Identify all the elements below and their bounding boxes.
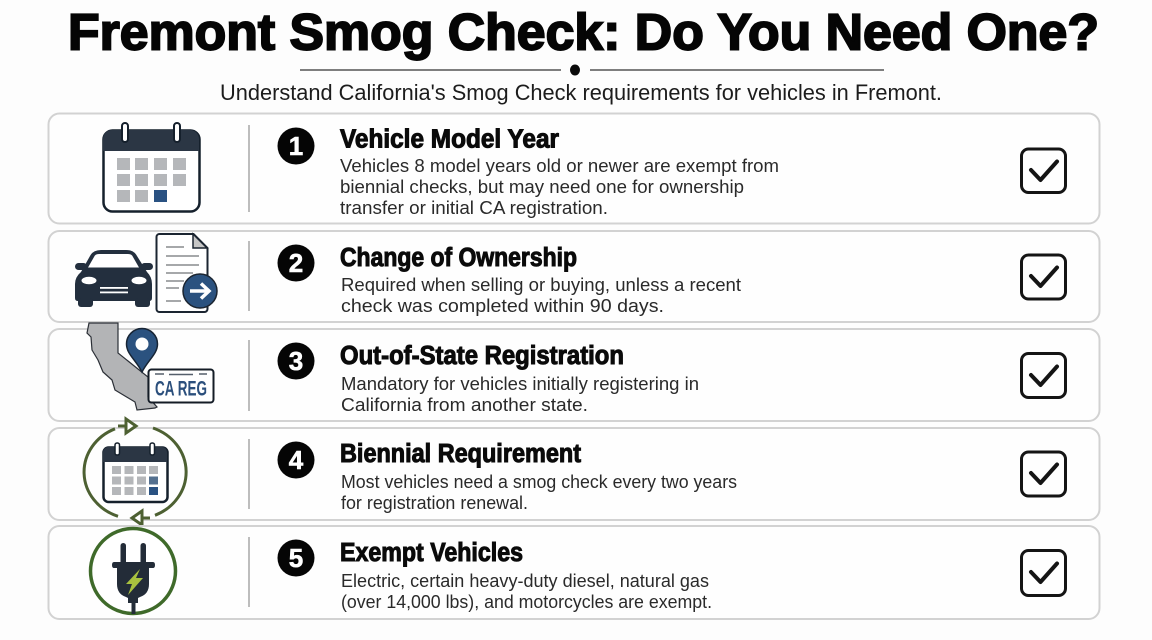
description: Mandatory for vehicles initially registering in xyxy=(341,373,699,394)
location pin xyxy=(126,328,158,372)
description: for registration renewal. xyxy=(341,492,528,513)
number badge 3: 3 xyxy=(289,346,303,376)
calendar xyxy=(104,448,168,502)
heading: Change of Ownership xyxy=(340,244,577,272)
description: Vehicles 8 model years old or newer are exempt from xyxy=(340,155,779,176)
description: check was completed within 90 days. xyxy=(341,295,664,316)
panel: exempt vehicles xyxy=(48,526,1100,619)
heading: Out-of-State Registration xyxy=(340,342,624,370)
license plate xyxy=(148,370,214,402)
icon: checkbox xyxy=(1022,149,1066,192)
number badge 1 xyxy=(278,128,314,164)
panel: out-of-state registration xyxy=(48,323,1100,421)
icon: calendar xyxy=(103,123,200,212)
icon: California map with pin and plate: CA REG xyxy=(155,378,207,400)
icon: electric plug xyxy=(90,528,176,614)
cycle arrows xyxy=(84,419,186,525)
number badge 4 xyxy=(278,442,314,478)
panel: vehicle model year xyxy=(48,114,1100,224)
number badge 5: 5 xyxy=(289,543,303,573)
icon: checkbox xyxy=(1022,452,1066,496)
lightning bolt xyxy=(126,569,143,595)
california map xyxy=(87,323,157,410)
description: Required when selling or buying, unless a recent xyxy=(341,274,741,295)
icon: California map with pin and plate xyxy=(87,323,214,410)
description xyxy=(340,155,779,218)
number badge 5 xyxy=(278,540,314,576)
description: Electric, certain heavy-duty diesel, natural gas xyxy=(341,570,709,591)
subtitle: Understand California's Smog Check requirements for vehicles in Fremont. xyxy=(220,80,942,105)
description xyxy=(341,274,741,316)
panel: biennial requirement xyxy=(48,419,1100,525)
title: Fremont Smog Check: Do You Need One? xyxy=(68,4,1099,60)
description: transfer or initial CA registration. xyxy=(340,197,608,218)
description: (over 14,000 lbs), and motorcycles are exempt. xyxy=(341,591,712,612)
description xyxy=(341,471,737,513)
number badge 1: 1 xyxy=(289,131,303,161)
description xyxy=(341,373,699,415)
number badge 2 xyxy=(278,244,314,282)
arrow badge xyxy=(183,274,217,308)
car xyxy=(75,250,153,307)
icon: calendar with cycle arrows xyxy=(84,419,186,525)
description: Most vehicles need a smog check every two years xyxy=(341,471,737,492)
heading: Exempt Vehicles xyxy=(340,539,523,567)
document xyxy=(156,234,208,312)
icon: checkbox xyxy=(1022,550,1066,596)
icon: checkbox xyxy=(1022,354,1066,398)
description: biennial checks, but may need one for ownership xyxy=(340,176,744,197)
description xyxy=(341,570,712,612)
heading: Vehicle Model Year xyxy=(340,126,559,154)
icon: car and document xyxy=(75,234,217,312)
number badge 2: 2 xyxy=(289,248,303,278)
icon: checkbox xyxy=(1022,255,1066,299)
number badge 4: 4 xyxy=(289,445,304,475)
number badge 3 xyxy=(278,342,314,380)
description: California from another state. xyxy=(341,394,588,415)
title divider xyxy=(300,64,884,76)
panel: change of ownership xyxy=(48,231,1100,322)
heading: Biennial Requirement xyxy=(340,440,581,468)
